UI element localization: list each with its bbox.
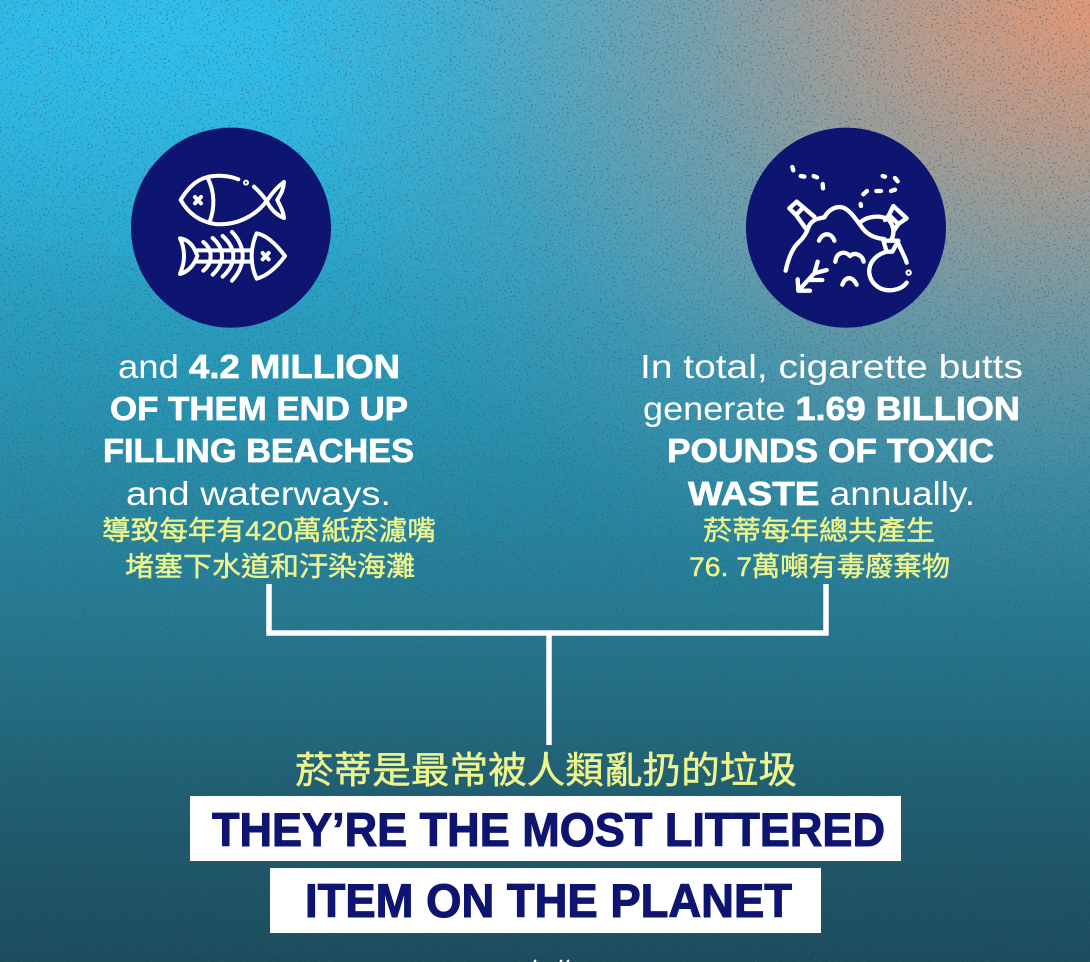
text block: Chinese beaches caption: 堵塞下水道和汙染海灘 <box>125 552 415 582</box>
text block: beaches and waterways <box>103 348 414 512</box>
text block: beaches and waterways: FILLING BEACHES <box>103 432 414 469</box>
text block: toxic waste: WASTE annually. <box>688 475 975 512</box>
text block: Chinese toxic waste caption: 菸蒂每年總共產生 <box>703 516 935 546</box>
text block: toxic waste: In total, cigarette butts <box>640 348 1023 385</box>
text block: Chinese toxic waste caption: 76. 7萬噸有毒廢棄物 <box>689 552 950 582</box>
text block: Chinese beaches caption: 導致每年有420萬紙菸濾嘴 <box>102 516 436 546</box>
text block: toxic waste <box>640 348 1023 512</box>
banner: most littered line one: THEY’RE THE MOST LITTERED <box>212 803 885 856</box>
icon: dead fish <box>181 176 284 224</box>
icon: fish skeleton <box>180 232 285 281</box>
text block: beaches and waterways: and waterways. <box>126 475 391 512</box>
text block: Chinese toxic waste caption <box>689 516 950 582</box>
icon: beach waste pile <box>746 128 946 328</box>
text block: Chinese beaches caption <box>102 516 436 582</box>
text block: beaches and waterways: and 4.2 MILLION <box>118 348 400 385</box>
text block: beaches and waterways: OF THEM END UP <box>110 390 408 427</box>
cropped element at bottom edge <box>534 960 569 962</box>
heading: Chinese conclusion: 菸蒂是最常被人類亂扔的垃圾 <box>295 750 797 791</box>
banner: most littered line two: ITEM ON THE PLANET <box>305 874 792 927</box>
bracket connector <box>269 584 826 745</box>
text block: toxic waste: generate 1.69 BILLION <box>643 390 1020 427</box>
icon: dead fish and fish skeleton <box>131 128 331 328</box>
text block: toxic waste: POUNDS OF TOXIC <box>667 432 994 469</box>
